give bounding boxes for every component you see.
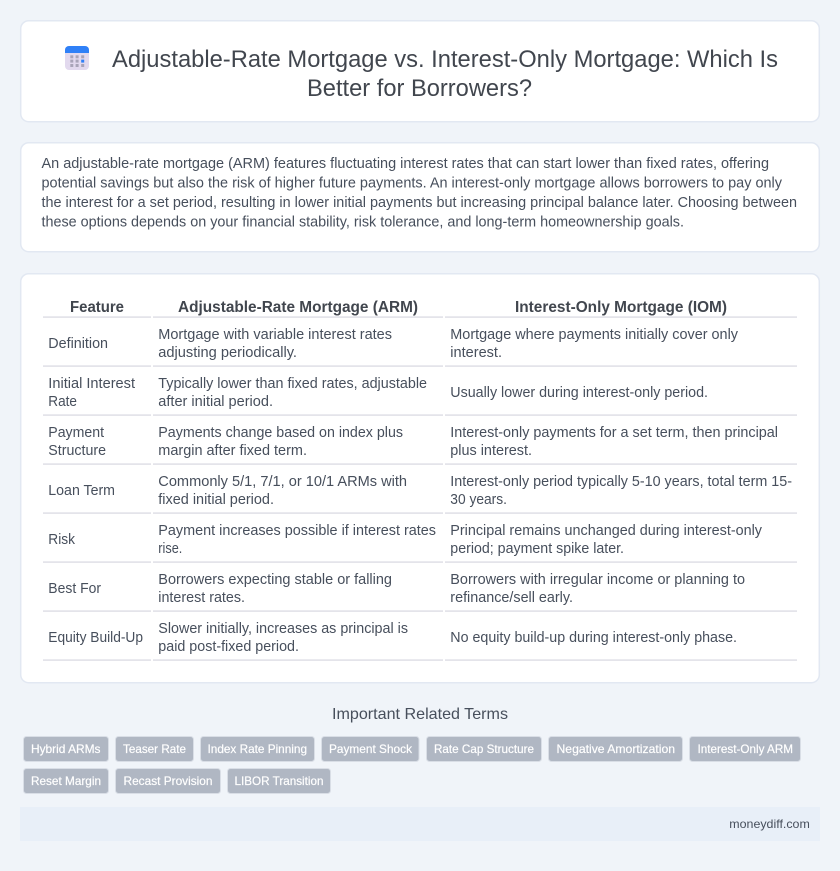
row: best for: Borrowers with irregular income or planning to — [450, 572, 745, 588]
row: risk: Risk — [48, 532, 76, 548]
row: best for: refinance/sell early. — [450, 590, 573, 606]
row: initial interest rate: Usually lower during interest-only period. — [450, 385, 708, 401]
row: initial interest rate: after initial period. — [158, 394, 273, 410]
row: risk: Payment increases possible if interest rates — [158, 523, 436, 539]
row: definition: Mortgage with variable interest rates — [158, 327, 392, 343]
panel: introduction — [21, 143, 819, 252]
table header row — [70, 299, 727, 316]
row: best for — [48, 572, 745, 606]
row: loan term — [48, 474, 792, 508]
row: equity build-up: No equity build-up during interest-only phase. — [450, 630, 737, 646]
row: initial interest rate: Rate — [48, 394, 77, 410]
intro paragraph: potential savings but also the risk of higher future payments. An interest-only mortgage allows borrowers to pay only — [42, 176, 783, 192]
intro paragraph — [42, 156, 797, 230]
table header row: Adjustable-Rate Mortgage (ARM) — [178, 299, 418, 316]
intro paragraph: An adjustable-rate mortgage (ARM) features fluctuating interest rates that can start lower than fixed rates, offering — [42, 156, 769, 172]
footer bar — [20, 807, 820, 841]
related term tags: Payment Shock — [329, 742, 413, 756]
row: definition: interest. — [450, 345, 502, 361]
row: best for: Best For — [48, 581, 101, 597]
related term tags — [24, 736, 800, 794]
related term tags: Teaser Rate — [123, 742, 186, 756]
row: equity build-up: Slower initially, increases as principal is — [158, 621, 408, 637]
title: Better for Borrowers? — [307, 75, 532, 102]
row: payment structure: margin after fixed term. — [158, 443, 307, 459]
footer bar: moneydiff.com — [729, 817, 810, 831]
row: best for: Borrowers expecting stable or falling — [158, 572, 392, 588]
row: equity build-up — [48, 621, 737, 655]
row: risk: Principal remains unchanged during interest-only — [450, 523, 763, 539]
panel: comparison table — [21, 274, 819, 683]
related term tags: Interest-Only ARM — [698, 742, 793, 756]
related term tags: Negative Amortization — [556, 742, 675, 756]
intro paragraph: these options depends on your financial stability, risk tolerance, and long-term homeownership goals. — [42, 214, 684, 230]
panel: title card — [21, 21, 819, 122]
table header row: Interest-Only Mortgage (IOM) — [515, 299, 727, 316]
related term tags: Recast Provision — [124, 774, 212, 788]
row: definition: Definition — [48, 336, 108, 352]
row: payment structure: Payment — [48, 425, 104, 441]
related term tags: LIBOR Transition — [234, 774, 324, 788]
icon: calendar grid — [65, 46, 89, 70]
title — [112, 46, 778, 102]
title: Adjustable-Rate Mortgage vs. Interest-Only Mortgage: Which Is — [112, 46, 778, 73]
row: loan term: fixed initial period. — [158, 492, 274, 508]
heading: important related terms: Important Related Terms — [332, 706, 508, 723]
row: loan term: Loan Term — [48, 483, 115, 499]
row: risk — [48, 523, 763, 557]
related term tags: Hybrid ARMs — [31, 742, 100, 756]
row: loan term: Commonly 5/1, 7/1, or 10/1 ARMs with — [158, 474, 407, 490]
row: initial interest rate: Typically lower than fixed rates, adjustable — [158, 376, 427, 392]
row: best for: interest rates. — [158, 590, 245, 606]
row: definition: adjusting periodically. — [158, 345, 297, 361]
row: equity build-up: Equity Build-Up — [48, 630, 143, 646]
row: definition: Mortgage where payments initially cover only — [450, 327, 739, 343]
row: payment structure: Interest-only payments for a set term, then principal — [450, 425, 778, 441]
intro paragraph: the interest for a set period, resulting in lower initial payments but increasing principal balance later. Choosing between — [42, 195, 797, 211]
row: payment structure: plus interest. — [450, 443, 532, 459]
row: initial interest rate — [48, 376, 708, 410]
row: risk: period; payment spike later. — [450, 541, 624, 557]
row: payment structure — [48, 425, 778, 459]
row: definition — [48, 327, 739, 361]
row: payment structure: Structure — [48, 443, 106, 459]
row: loan term: Interest-only period typically 5-10 years, total term 15- — [450, 474, 792, 490]
row: payment structure: Payments change based on index plus — [158, 425, 403, 441]
row: equity build-up: paid post-fixed period. — [158, 639, 299, 655]
row: initial interest rate: Initial Interest — [48, 376, 135, 392]
row: risk: rise. — [158, 541, 182, 557]
row: loan term: 30 years. — [450, 492, 507, 508]
table header row: Feature — [70, 299, 124, 316]
related term tags: Reset Margin — [31, 774, 101, 788]
related term tags: Index Rate Pinning — [208, 742, 307, 756]
related term tags: Rate Cap Structure — [434, 742, 534, 756]
